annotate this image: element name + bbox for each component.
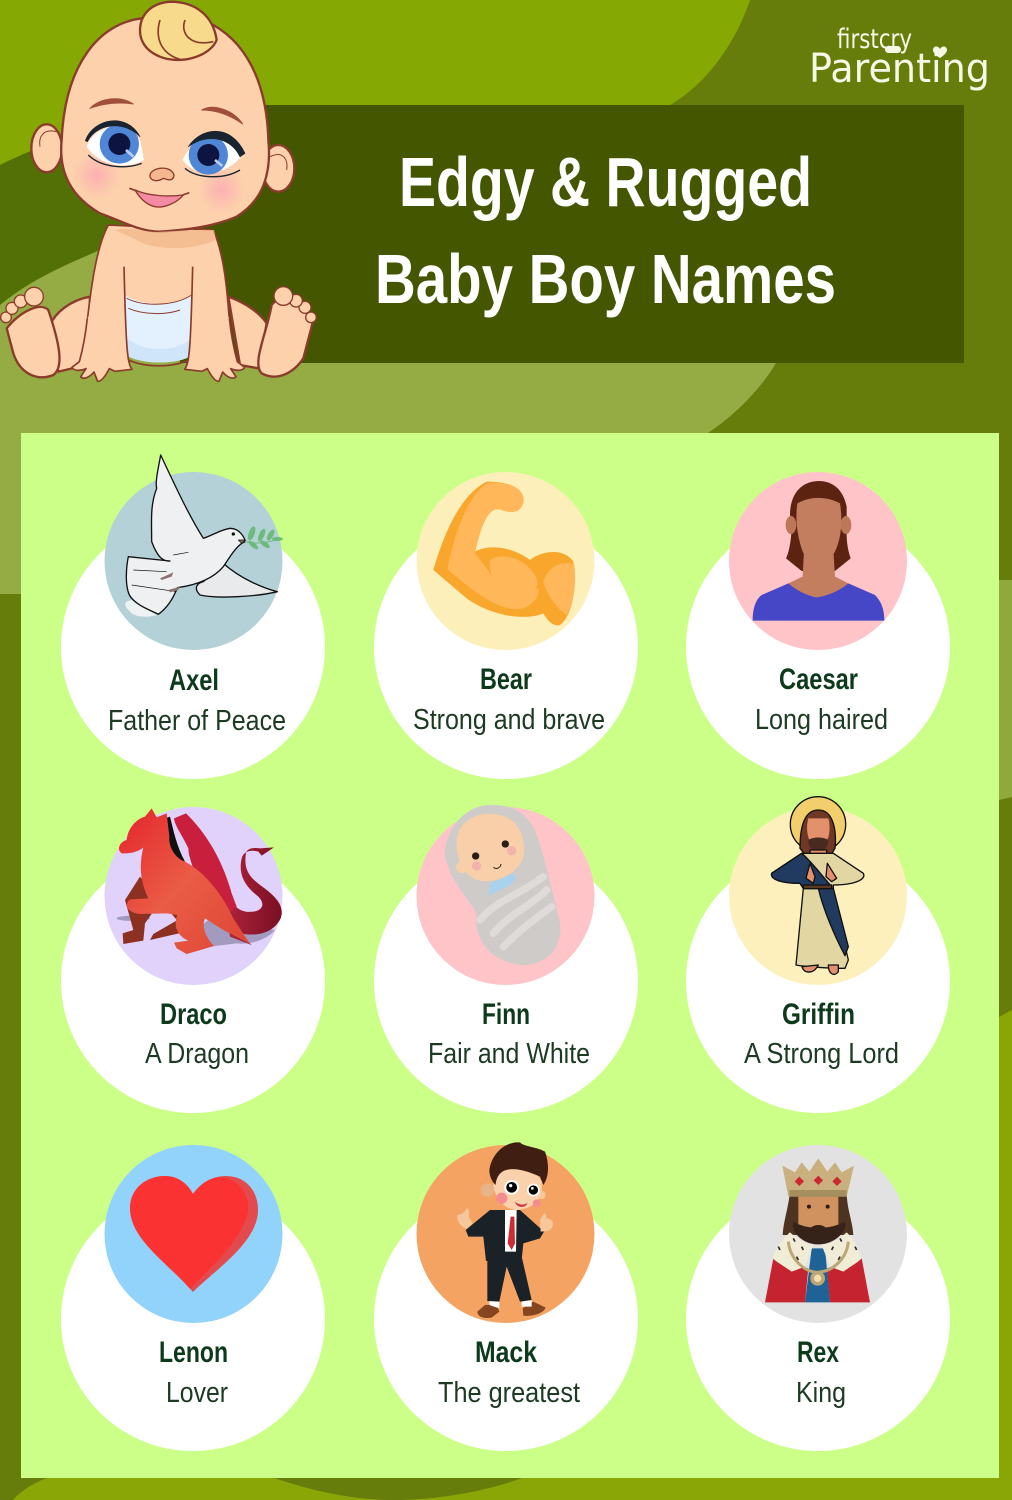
meaning: Fair and White: Fair and White <box>428 1038 590 1070</box>
title <box>375 143 836 318</box>
card: Caesar <box>686 472 950 779</box>
label: Lenon: Lenon <box>159 1336 228 1369</box>
card: Rex <box>686 1145 950 1451</box>
icon: red dragon <box>117 808 282 954</box>
meaning: A Dragon: A Dragon <box>145 1038 249 1070</box>
card: Griffin <box>686 797 950 1113</box>
label: Finn: Finn <box>482 998 530 1031</box>
meaning: The greatest: The greatest <box>438 1377 580 1409</box>
card: Bear <box>374 472 638 779</box>
meaning: King: King <box>796 1377 846 1409</box>
meaning: Strong and brave: Strong and brave <box>413 704 605 736</box>
card: Lenon <box>61 1145 325 1451</box>
label: Bear: Bear <box>480 663 532 696</box>
card: Finn <box>374 805 638 1113</box>
icon: boy in suit <box>457 1142 553 1318</box>
label: Griffin: Griffin <box>782 998 855 1031</box>
title: Edgy & Rugged <box>399 143 812 221</box>
meaning: Father of Peace: Father of Peace <box>108 705 286 737</box>
label: Draco: Draco <box>160 998 227 1031</box>
label: Axel: Axel <box>169 664 219 697</box>
title: Baby Boy Names <box>375 240 836 318</box>
card: Axel <box>61 455 325 779</box>
meaning: Lover: Lover <box>166 1377 228 1409</box>
icon: bearded king <box>765 1158 870 1302</box>
illustration: sitting baby <box>1 2 316 381</box>
panel background <box>21 433 999 1478</box>
icon: dove <box>125 455 283 617</box>
logo: FirstCry Parenting <box>809 24 990 92</box>
icon: long-haired man <box>753 481 884 621</box>
meaning: A Strong Lord: A Strong Lord <box>744 1038 899 1070</box>
logo: FirstCry Parenting: Parenting <box>809 46 990 92</box>
label: Rex: Rex <box>797 1336 839 1369</box>
label: Mack: Mack <box>475 1336 537 1369</box>
title banner <box>180 105 964 363</box>
icon: flexed bicep <box>433 482 575 625</box>
names panel <box>21 433 999 1478</box>
logo: FirstCry Parenting: firstcry <box>837 24 912 55</box>
meaning: Long haired: Long haired <box>755 704 888 736</box>
icon: robed lord with halo <box>772 797 864 974</box>
icon: swaddled baby <box>445 805 560 965</box>
card: Draco <box>61 807 325 1113</box>
icon: red heart <box>130 1176 258 1292</box>
label: Caesar: Caesar <box>779 663 858 696</box>
card: Mack <box>374 1142 638 1451</box>
